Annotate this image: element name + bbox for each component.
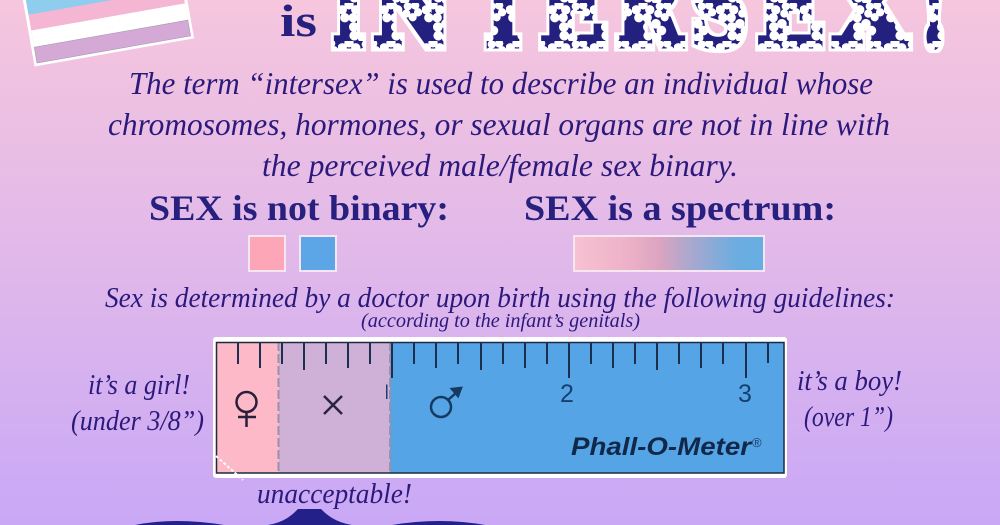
ruler numbers: 1 xyxy=(379,380,393,408)
heading: SEX is a spectrum: SEX is a spectrum: xyxy=(524,188,836,228)
label: unacceptable: unacceptable! xyxy=(257,478,412,510)
heading word: INTERSEX! in floral letters xyxy=(333,0,947,70)
icon: intersex cross xyxy=(324,396,342,414)
label: it's a girl: (under 3/8”) xyxy=(71,405,204,437)
icon: female symbol xyxy=(236,392,256,427)
label: it's a boy: it’s a boy! xyxy=(797,365,902,397)
text: according to genitals: (according to the infant’s genitals) xyxy=(361,310,640,332)
label: it's a boy: (over 1”) xyxy=(804,401,893,433)
heading: is INTERSEX! xyxy=(280,0,947,70)
heading: SEX is not binary: SEX is not binary: xyxy=(149,188,449,228)
text: guidelines sentence: Sex is determined by a doctor upon birth using the following guidelines: xyxy=(105,282,895,314)
text block: definition of intersex: chromosomes, hormones, or sexual organs are not in line with xyxy=(108,106,890,142)
label: it's a girl xyxy=(71,369,204,437)
icon: male symbol xyxy=(431,388,461,417)
label: it's a girl: it’s a girl! xyxy=(88,369,190,401)
brand name: Phall-O-Meter xyxy=(571,433,752,461)
swatch: blue xyxy=(300,236,336,271)
text block: definition of intersex: The term “intersex” is used to describe an individual whose xyxy=(129,65,873,101)
ruler numbers: 2 xyxy=(560,380,574,408)
brace xyxy=(135,509,485,525)
swatch: spectrum gradient xyxy=(574,236,764,271)
icon: intersex flag xyxy=(17,0,194,66)
ruler ticks xyxy=(238,342,768,378)
registered mark: ® xyxy=(752,435,762,450)
swatch: pink xyxy=(249,236,285,271)
label: it's a boy xyxy=(797,365,902,433)
text block: definition of intersex: the perceived male/female sex binary. xyxy=(262,147,738,183)
ruler numbers xyxy=(386,384,751,402)
ruler numbers: 3 xyxy=(738,380,752,408)
text block: definition of intersex xyxy=(108,65,890,183)
chart: Phall-O-Meter ruler xyxy=(213,337,787,480)
